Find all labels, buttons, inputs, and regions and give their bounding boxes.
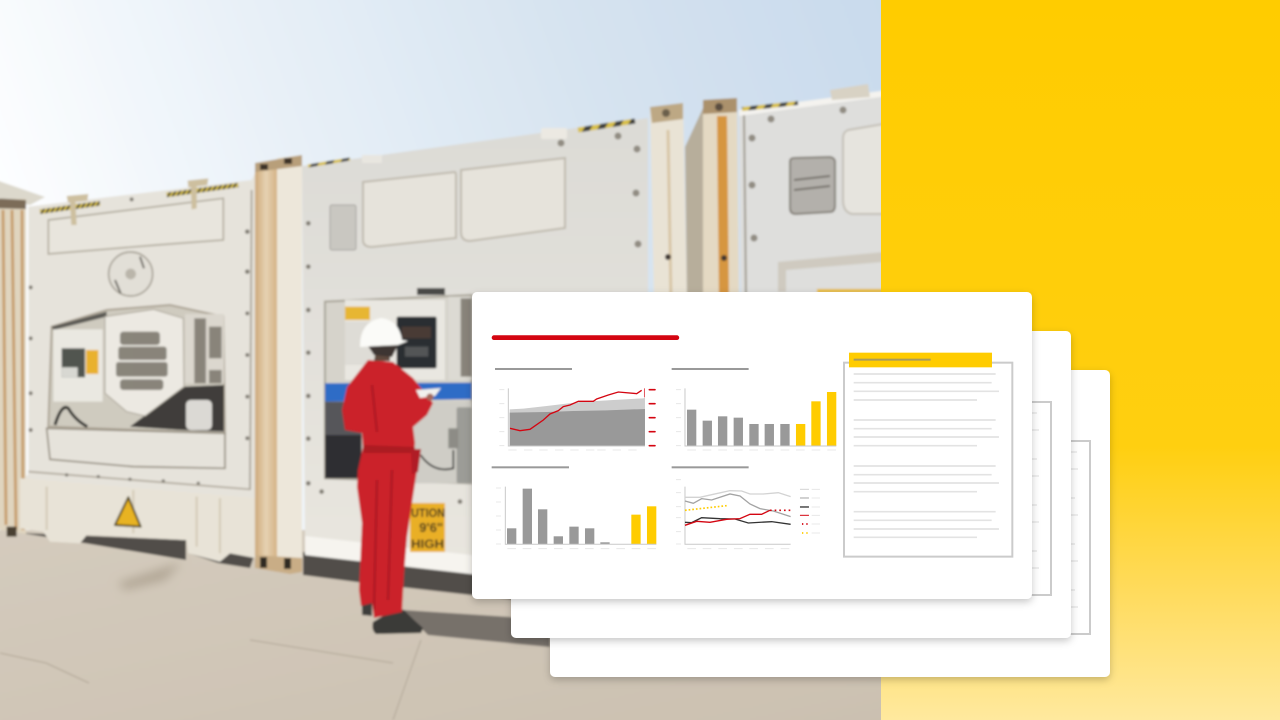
right corner posts xyxy=(650,98,739,300)
middle report page xyxy=(511,331,1071,638)
chart 4: multi-line chart with legend xyxy=(672,466,820,549)
machinery recess xyxy=(48,305,225,433)
photo: technician inspecting reefer containers xyxy=(0,0,900,720)
front report page xyxy=(472,292,1032,599)
reefer control unit recess xyxy=(306,221,472,504)
caution height sign xyxy=(410,503,445,552)
right reefer container xyxy=(558,84,895,300)
technician in red coveralls xyxy=(342,318,441,634)
sky xyxy=(23,0,881,529)
yellow background panel xyxy=(881,0,1280,720)
chart 3: column chart xyxy=(492,466,656,549)
chart 2: column chart xyxy=(672,368,836,450)
corner posts between containers xyxy=(255,155,302,574)
text summary box xyxy=(844,353,1012,557)
yellow box header xyxy=(849,353,992,367)
shadow under containers xyxy=(21,533,520,600)
concrete ground xyxy=(0,530,900,720)
far-left container sliver xyxy=(0,178,45,534)
caution height sign: 9'6" xyxy=(419,520,443,535)
red title bar xyxy=(492,335,679,340)
chart 1: area chart with red line xyxy=(495,368,655,450)
back report page xyxy=(550,370,1110,677)
middle reefer container xyxy=(302,118,648,575)
left reefer container xyxy=(7,170,257,562)
caution height sign: UTION xyxy=(411,506,445,520)
placeholder text lines xyxy=(854,374,999,537)
caution height sign: HIGH xyxy=(411,537,444,551)
chart legend xyxy=(800,489,820,533)
